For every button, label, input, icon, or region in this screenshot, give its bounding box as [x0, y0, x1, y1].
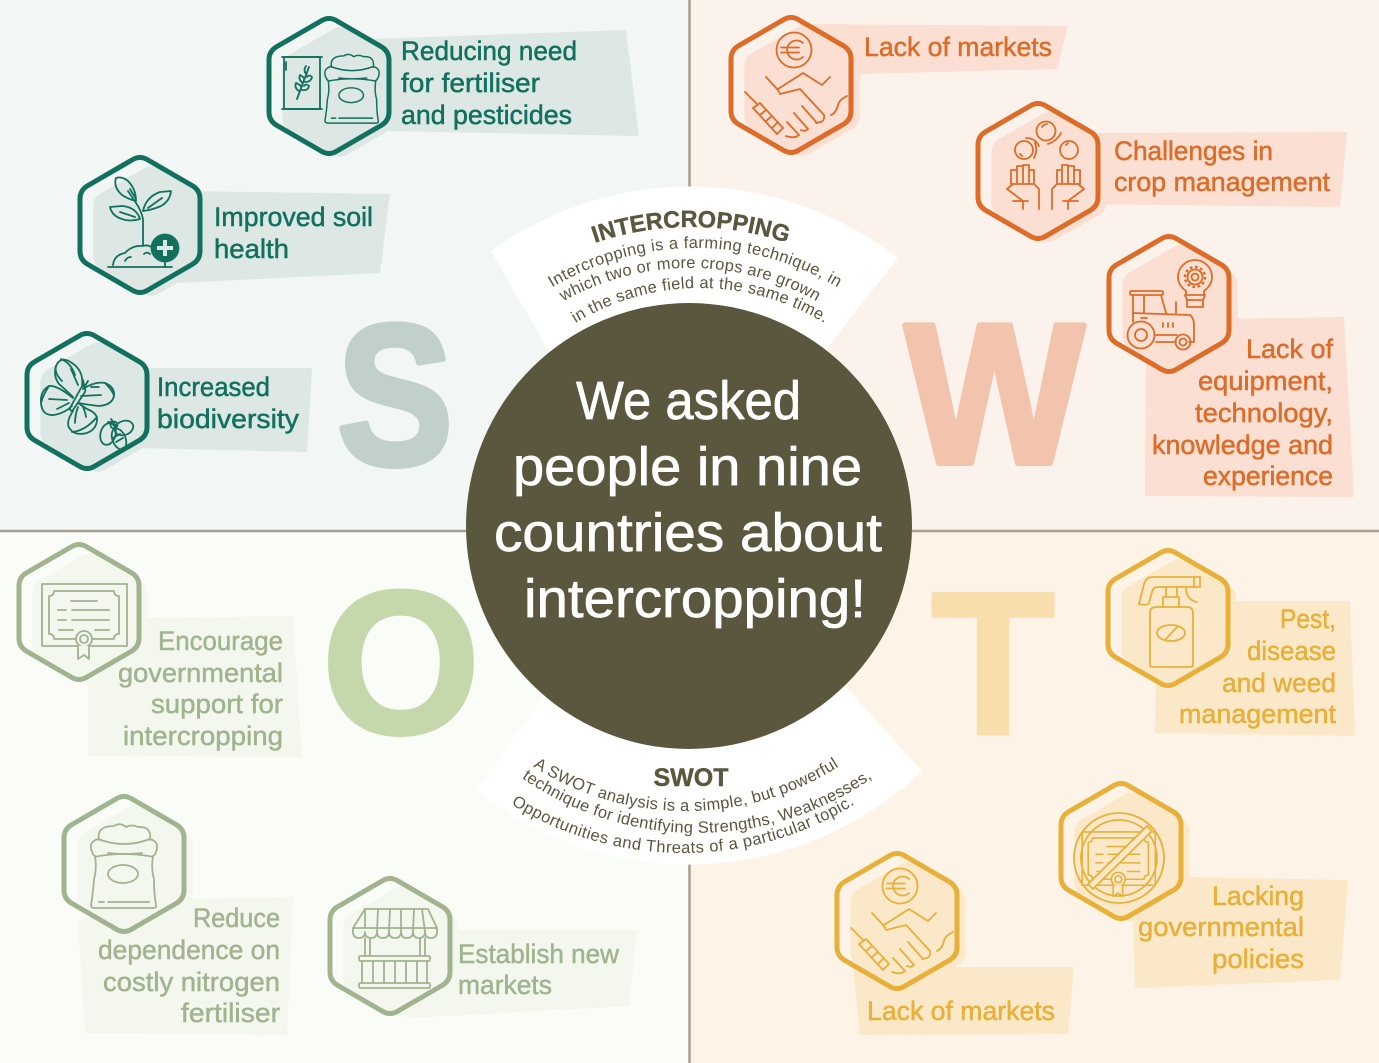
- text: lacking governmental policies: Lacking: [1212, 881, 1304, 911]
- item: lack of markets: [837, 854, 1074, 1035]
- text: reduce dependence: Reduce: [193, 903, 280, 933]
- text: increased biodiversity: [157, 372, 300, 434]
- text: challenges in crop management: crop management: [1114, 167, 1330, 197]
- panel: opportunities: [0, 531, 690, 1063]
- text: swot definition: technique for identifying Strengths, Weaknesses,: [523, 770, 872, 836]
- text: lack of equipment: equipment,: [1198, 366, 1333, 396]
- text: reduce dependence: fertiliser: [181, 998, 280, 1028]
- heading: we asked people in nine countries about intercropping: We asked: [576, 371, 801, 431]
- icon: fertiliser bag: [64, 796, 193, 935]
- text: encourage governmental support: Encourage: [158, 626, 283, 656]
- text: challenges in crop management: [1114, 136, 1330, 197]
- item: challenges in crop management: [978, 104, 1347, 242]
- text: improved soil health: Improved soil: [214, 202, 373, 232]
- icon: certificate prohibited: [1061, 784, 1190, 922]
- item: reduce dependence on nitrogen fertiliser: [64, 796, 293, 1035]
- panel: swot definition: [514, 687, 922, 865]
- item: pest, disease and weed management: [1108, 550, 1355, 736]
- text: swot definition: Opportunities and Threats of a particular topic.: [514, 796, 854, 854]
- icon: market stall: [330, 878, 459, 1017]
- icon: handshake with euro coin: [837, 854, 966, 992]
- heading: swot: SWOT: [654, 764, 728, 792]
- text: encourage governmental support: support for: [151, 689, 283, 719]
- big letter T: T: [931, 550, 1055, 778]
- text: improved soil health: health: [214, 234, 289, 264]
- text: improved soil health: [214, 202, 373, 264]
- item: encourage governmental support: [19, 544, 302, 757]
- text: lacking governmental policies: [1138, 881, 1304, 974]
- text: increased biodiversity: biodiversity: [157, 404, 300, 434]
- panel: threats: [690, 531, 1379, 1063]
- icon: handshake with euro coin: [731, 18, 860, 156]
- text: establish new markets: [458, 939, 619, 1000]
- text: establish new markets: Establish new: [458, 939, 619, 969]
- text: increased biodiversity: Increased: [157, 372, 270, 402]
- text: reducing need: [401, 36, 577, 130]
- icon: seedling with plus: [80, 158, 209, 296]
- heading: intercropping: INTERCROPPING: [591, 210, 790, 243]
- icon: certificate: [19, 544, 148, 683]
- item: lack of markets: [731, 18, 1068, 156]
- text: pest disease: [1179, 604, 1336, 729]
- text: intercropping definition: which two or more crops are grown: [559, 259, 820, 301]
- text: reduce dependence: dependence on: [98, 935, 280, 965]
- icon: butterfly and bee: [27, 334, 156, 472]
- text: pest disease: and weed: [1222, 668, 1336, 698]
- big letter S: S: [337, 283, 453, 507]
- text: establish new markets: markets: [458, 970, 552, 1000]
- item: improved soil health: [80, 158, 390, 296]
- text: intercropping definition: Intercropping is a farming technique, in: [548, 236, 840, 287]
- text: lack of equipment: Lack of: [1246, 334, 1333, 364]
- heading: we asked people in nine countries about intercropping: intercropping!: [524, 569, 866, 629]
- text: lacking governmental policies: policies: [1212, 944, 1304, 974]
- text: lack of equipment: technology,: [1195, 398, 1333, 428]
- big letter O: O: [322, 549, 480, 777]
- center circle with headline: [466, 303, 912, 749]
- panel: strengths: [0, 0, 690, 531]
- panel: intercropping definition: [491, 186, 898, 351]
- icon: juggling hands: [978, 104, 1107, 242]
- heading: we asked people in nine countries about intercropping: people in nine: [513, 437, 862, 497]
- panel: weaknesses: [690, 0, 1379, 531]
- item: increased biodiversity: [27, 334, 312, 472]
- text: pest disease: Pest,: [1280, 604, 1336, 634]
- text: encourage governmental support: intercropping: [123, 721, 283, 751]
- item: establish new markets: [330, 878, 637, 1018]
- text: lack of equipment: knowledge and: [1152, 430, 1333, 460]
- text: reduce dependence: [98, 903, 280, 1028]
- text: reducing need: for fertiliser: [401, 68, 540, 98]
- text: lack of markets: Lack of markets: [867, 996, 1055, 1026]
- text: reduce dependence: costly nitrogen: [103, 967, 280, 997]
- item: lack of equipment, technology, knowledge and experience: [1109, 236, 1354, 497]
- text: lack of equipment: experience: [1203, 461, 1333, 491]
- icon: seed packet and fertiliser bag: [269, 18, 398, 157]
- heading: we asked people in nine countries about intercropping: countries about: [494, 503, 882, 563]
- text: reducing need: Reducing need: [401, 36, 577, 66]
- text: encourage governmental support: governmental: [118, 658, 283, 688]
- icon: spray bottle: [1108, 550, 1237, 689]
- text: lacking governmental policies: governmental: [1138, 912, 1304, 942]
- text: intercropping definition: in the same field at the same time.: [570, 276, 824, 322]
- text: pest disease: disease: [1247, 636, 1336, 666]
- text: lack of markets: Lack of markets: [864, 32, 1052, 62]
- big letter W: W: [905, 283, 1084, 506]
- text: swot definition: A SWOT analysis is a simple, but powerful: [533, 756, 838, 812]
- text: pest disease: management: [1179, 699, 1336, 729]
- text: intercropping definition: [548, 236, 840, 322]
- icon: tractor and lightbulb gear: [1109, 236, 1238, 375]
- text: challenges in crop management: Challenges in: [1114, 136, 1273, 166]
- item: reducing need for fertiliser and pesticides: [269, 18, 639, 157]
- item: lacking governmental policies: [1061, 784, 1348, 988]
- text: reducing need: and pesticides: [401, 100, 572, 130]
- heading: we asked people in nine countries about intercropping: [494, 371, 882, 629]
- text: lack of equipment: [1152, 334, 1333, 491]
- text: encourage governmental support: [118, 626, 283, 751]
